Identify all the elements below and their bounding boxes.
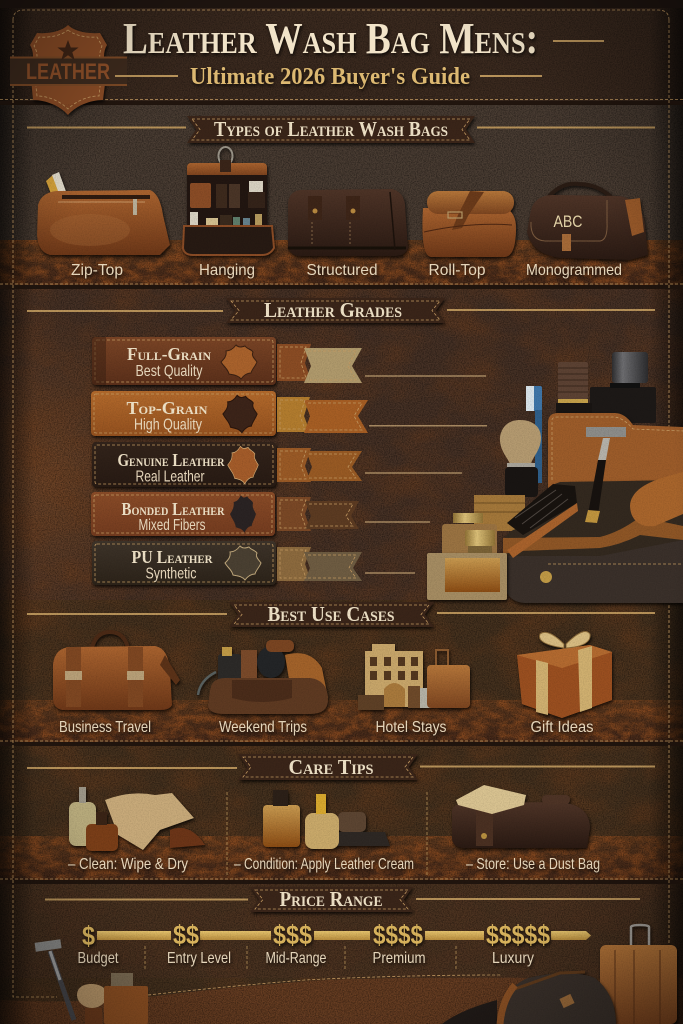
tick dividers [145,946,456,970]
label: entry level: Entry Level [167,950,231,967]
label: gift ideas: Gift Ideas [530,719,594,736]
grade: full-grain: Full-Grain [127,344,211,364]
grade: pu leather: Synthetic [146,566,196,582]
icon: suitcase [600,925,677,1024]
icon: shaving brush [500,420,541,497]
label: premium: Premium [372,950,426,967]
grade: full-grain: Best Quality [136,363,202,380]
shelf: types [0,240,683,285]
icon: black cologne bottle [590,352,656,423]
label: roll-top: Roll-Top [428,262,486,279]
left edge shading [0,0,34,1024]
heading: best use cases [27,602,655,627]
icon: cologne [104,973,148,1024]
heading: best use cases: Best Use Cases [268,602,394,626]
label: structured: Structured [306,262,378,279]
icon: clean cloth and bottles [69,787,205,851]
title accent lines [115,41,604,76]
label: luxury: Luxury [492,950,534,967]
illustration: grooming kit [427,352,683,603]
panel: best use cases [53,632,612,736]
heading: types [27,116,655,143]
panel: price range [35,920,677,1024]
heading: price range [45,887,640,912]
shelf: use cases [0,700,683,742]
icon: zip-top bag [37,172,170,255]
icon: leather bag [503,480,683,603]
bottom curved stitch [148,975,501,995]
icon: shaving brush [77,984,107,1024]
icon: store bag and cloth [452,785,590,848]
panel: care tips [68,785,600,875]
icon: razor [35,939,74,1020]
grade: genuine leather [92,442,362,487]
icon: monogrammed bag: ABC [554,212,582,231]
tip: condition: – Condition: Apply Leather Cream [234,856,414,873]
label: weekend trips: Weekend Trips [219,719,307,736]
grade: bonded leather [91,492,359,536]
icon: leather logo badge [10,25,127,115]
grade: top-grain: Top-Grain [126,398,208,418]
heading: price range: Price Range [280,887,382,911]
divider lines [227,792,427,875]
leader lines [365,376,487,573]
label: budget: Budget [78,950,119,967]
icon: brass stud [540,571,552,583]
icon: gift box [517,632,612,718]
top dark strip [0,0,683,8]
heading: leather grades: Leather Grades [264,298,402,322]
price symbol: budget: $ [82,921,95,951]
grade: bonded leather: Mixed Fibers [138,517,206,534]
icon: wooden boxes [474,495,525,531]
label: hotel stays: Hotel Stays [376,719,446,736]
heading: care tips: Care Tips [288,755,374,779]
grade: genuine leather: Real Leather [136,468,205,486]
icon: roll-top bag [422,191,516,257]
shelf texture: use cases [0,700,683,742]
label: zip-top: Zip-Top [71,262,123,279]
icon: rolled leather [630,472,683,526]
grade: pu leather [92,541,362,585]
price symbol: mid-range: $$$ [273,920,312,950]
price symbol: entry level: $$ [173,920,199,950]
heading: types: Types of Leather Wash Bags [214,117,448,141]
icon: hanging bag [183,147,274,255]
icon: structured bag [288,189,408,256]
subtitle: Ultimate 2026 Buyer's Guide [190,64,470,90]
icon: leather logo badge: LEATHER [26,59,110,84]
icon: business briefcase [53,632,180,710]
price scale bar [97,931,591,940]
label: mid-range: Mid-Range [266,950,327,967]
icon: condition bottle and cream [263,790,390,849]
shelf: care tips [0,836,683,880]
icon: monogrammed bag [527,184,648,260]
grade: top-grain: High Quality [134,416,202,434]
icon: front perfume [427,530,507,600]
icon: comb [442,1000,497,1024]
label: monogrammed: Monogrammed [526,262,622,279]
icon: razor [585,427,626,523]
grade: bonded leather: Bonded Leather [122,499,225,519]
grade: genuine leather: Genuine Leather [118,450,225,470]
icon: hotel and suitcase [358,644,470,710]
tip: store: – Store: Use a Dust Bag [466,856,600,873]
icon: clothes brush [507,484,578,558]
icon: toothbrush [526,386,542,483]
panel: types of bags [37,147,648,279]
background: grades section wall [0,288,683,600]
panel: leather grades [91,337,487,585]
icon: ribbed cologne bottle [556,362,592,415]
shelf texture: types [0,240,683,285]
icon: tan leather pocket [548,413,683,490]
tip: clean: – Clean: Wipe & Dry [68,856,188,873]
heading: care tips [27,754,655,780]
price symbol: luxury: $$$$$ [486,920,550,950]
grade: top-grain [91,391,368,436]
icon: weekend bag [198,640,328,714]
heading: leather grades [27,298,655,323]
label: hanging: Hanging [199,262,255,279]
bottom leather patch [0,975,683,1024]
header band [0,8,683,101]
right edge shading [649,0,683,1024]
background: types section wall [0,104,683,240]
price symbol: premium: $$$$ [373,920,423,950]
icon: duffle bag [497,972,616,1024]
title: Leather Wash Bag Mens: [123,14,538,63]
grade: pu leather: PU Leather [132,547,213,567]
grade: full-grain [92,337,362,385]
background: rust mottling [0,288,683,1024]
icon: back perfume [442,513,497,556]
shelf texture: care tips [0,836,683,880]
background: rust blotch left of grades [0,320,160,640]
icon: stitching on bag [548,563,683,565]
label: business travel: Business Travel [59,719,151,736]
price section tone [0,884,683,978]
